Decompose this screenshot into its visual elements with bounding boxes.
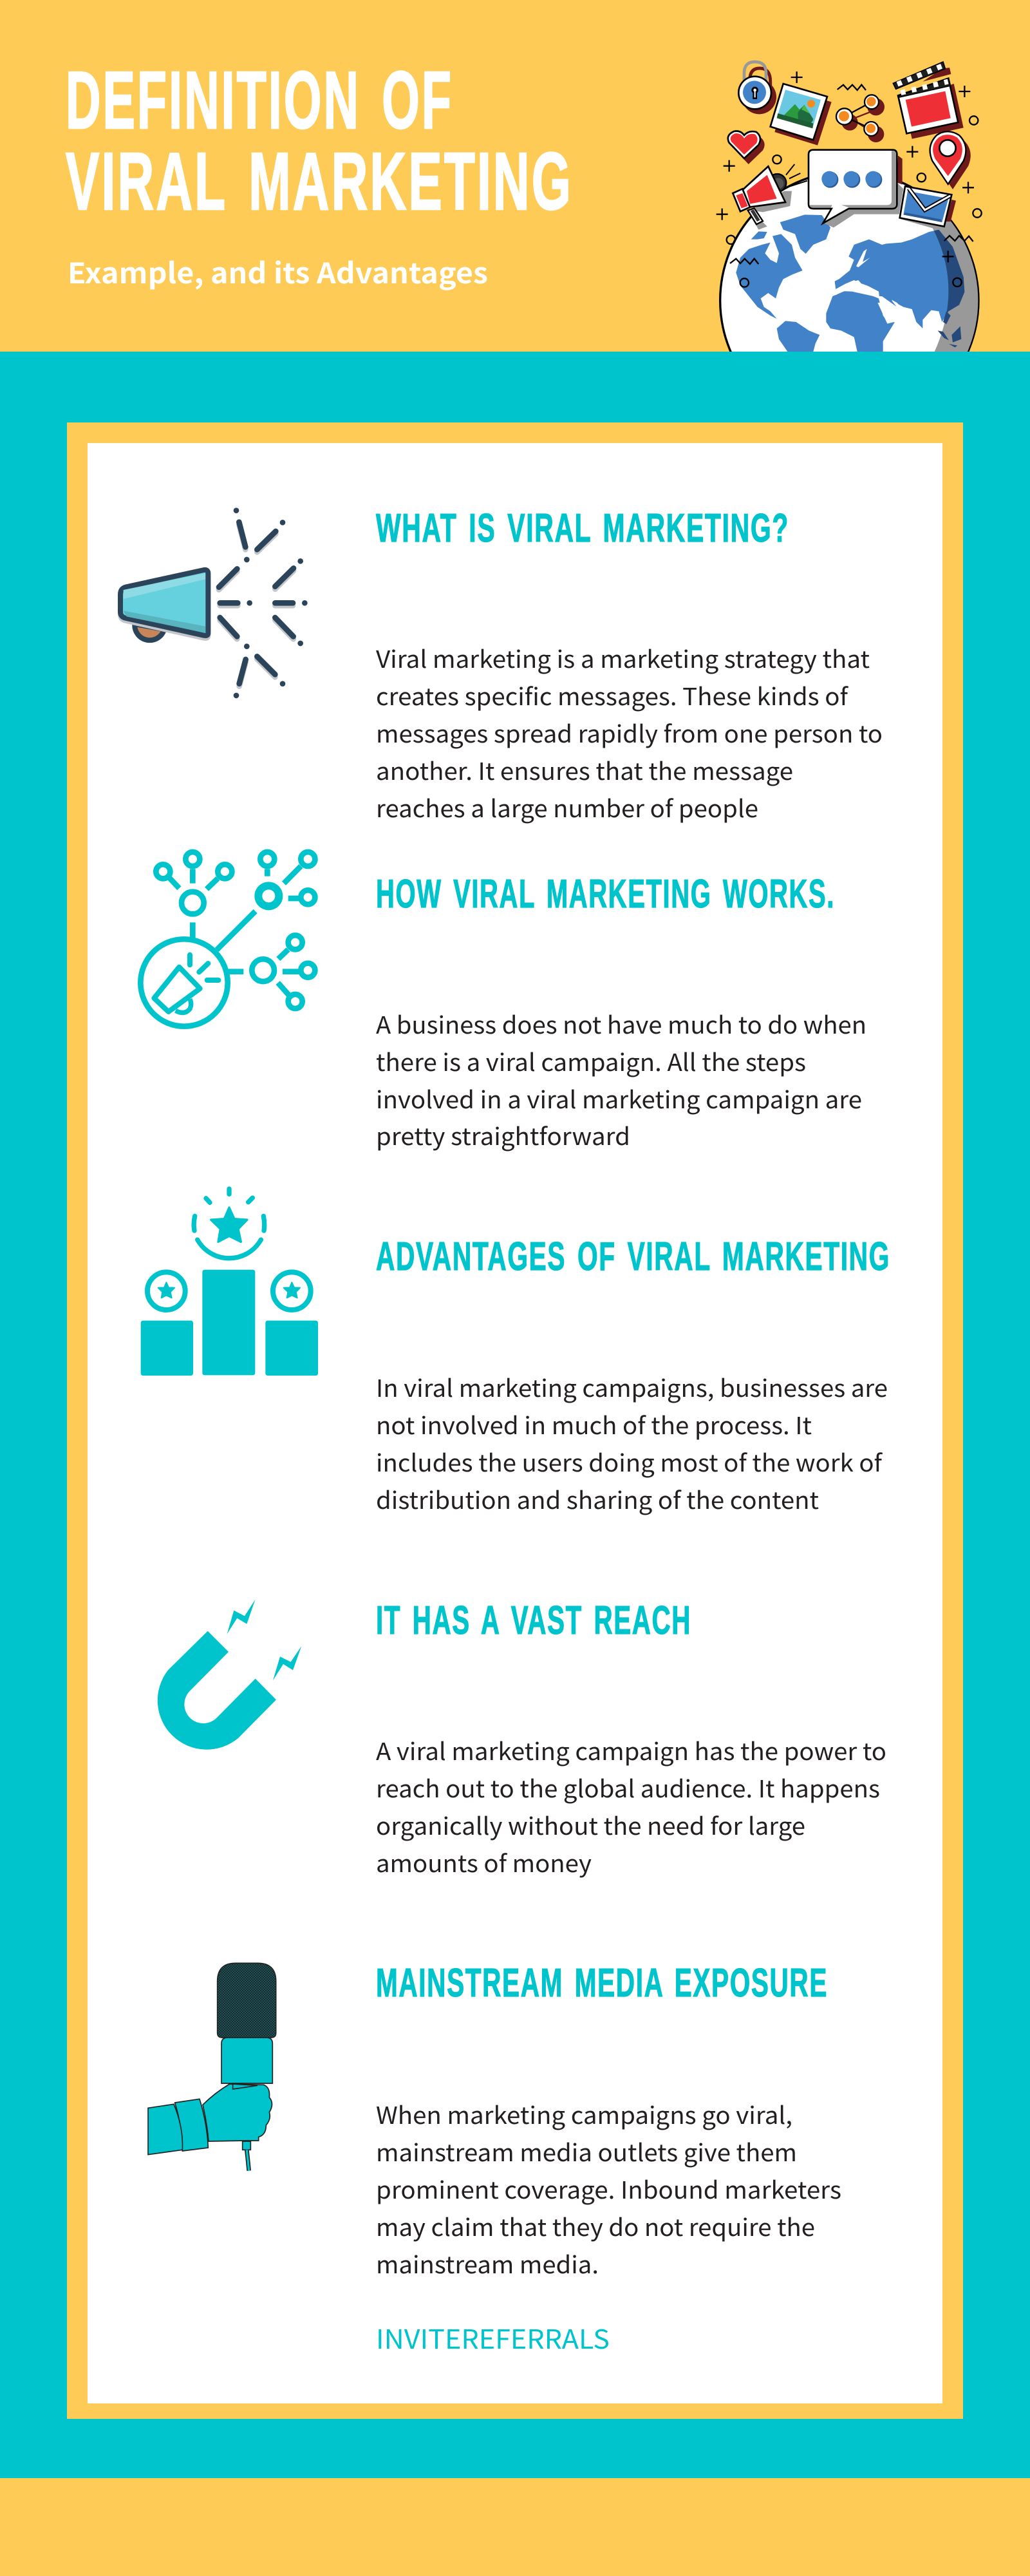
heading: WHAT IS VIRAL MARKETING? (376, 506, 789, 551)
icon: envelope (900, 186, 956, 227)
body text: When marketing campaigns go viral, (376, 2096, 792, 2131)
body text: not involved in much of the process. It (376, 1406, 812, 1441)
body text (376, 640, 883, 824)
body text: mainstream media outlets give them (376, 2134, 797, 2168)
body text: messages spread rapidly from one person to (376, 715, 883, 750)
illustration: globe with social media icons (716, 61, 982, 352)
decorative plus, ring and zigzag marks (716, 71, 982, 287)
icon: speech bubble (809, 150, 903, 223)
section 2: how viral marketing works (140, 852, 866, 1152)
body text: reaches a large number of people (376, 790, 758, 824)
body text: Viral marketing is a marketing strategy that (376, 640, 870, 675)
body text: prominent coverage. Inbound marketers (376, 2171, 841, 2206)
icon: megaphone (733, 164, 807, 224)
body text: creates specific messages. These kinds of (376, 677, 849, 712)
globe (719, 176, 980, 352)
icon: magnet (158, 1599, 301, 1750)
icon: padlock (738, 62, 776, 114)
body text: distribution and sharing of the content (376, 1481, 819, 1516)
body text: A viral marketing campaign has the power to (376, 1732, 886, 1767)
body text: mainstream media. (376, 2246, 599, 2280)
body text (376, 1006, 866, 1152)
icon: network megaphone (140, 852, 315, 1027)
body text (376, 2096, 841, 2280)
panel: yellow frame (67, 422, 963, 2419)
body text: may claim that they do not require the (376, 2208, 815, 2243)
body text: there is a viral campaign. All the steps (376, 1043, 806, 1078)
section 5: mainstream media exposure (148, 1961, 841, 2356)
icon: hand holding microphone (148, 1963, 276, 2171)
seas cut through the land (835, 249, 901, 324)
body text: involved in a viral marketing campaign are (376, 1081, 862, 1115)
drop shadows on globe (754, 183, 939, 231)
body text: includes the users doing most of the work of (376, 1444, 883, 1479)
brand credit: INVITEREFERRALS (376, 2318, 610, 2356)
title (66, 55, 573, 227)
body text (376, 1369, 888, 1516)
subtitle: Example, and its Advantages (68, 251, 488, 292)
icon: location pin (930, 131, 971, 189)
body text: pretty straightforward (376, 1117, 630, 1152)
body text: organically without the need for large (376, 1807, 805, 1842)
heading: IT HAS A VAST REACH (376, 1598, 691, 1643)
icon: podium with stars (141, 1189, 318, 1376)
icon: heart (728, 131, 765, 164)
icon: clapperboard (893, 62, 964, 139)
title: VIRAL MARKETING (66, 136, 573, 227)
title: DEFINITION OF (66, 55, 453, 146)
body text: another. It ensures that the message (376, 752, 793, 787)
icon: picture (771, 84, 832, 146)
icon: share (836, 95, 885, 142)
panel: white content card (88, 443, 942, 2403)
body text: In viral marketing campaigns, businesses are (376, 1369, 888, 1404)
body text: A business does not have much to do when (376, 1006, 866, 1041)
section 3: advantages of viral marketing (141, 1189, 890, 1516)
body text: reach out to the global audience. It happens (376, 1770, 880, 1804)
section 4: it has a vast reach (158, 1598, 886, 1879)
body text (376, 1732, 886, 1879)
body text: amounts of money (376, 1844, 592, 1879)
icon: megaphone with sound rays (120, 507, 308, 698)
section 1: what is viral marketing (120, 506, 883, 824)
